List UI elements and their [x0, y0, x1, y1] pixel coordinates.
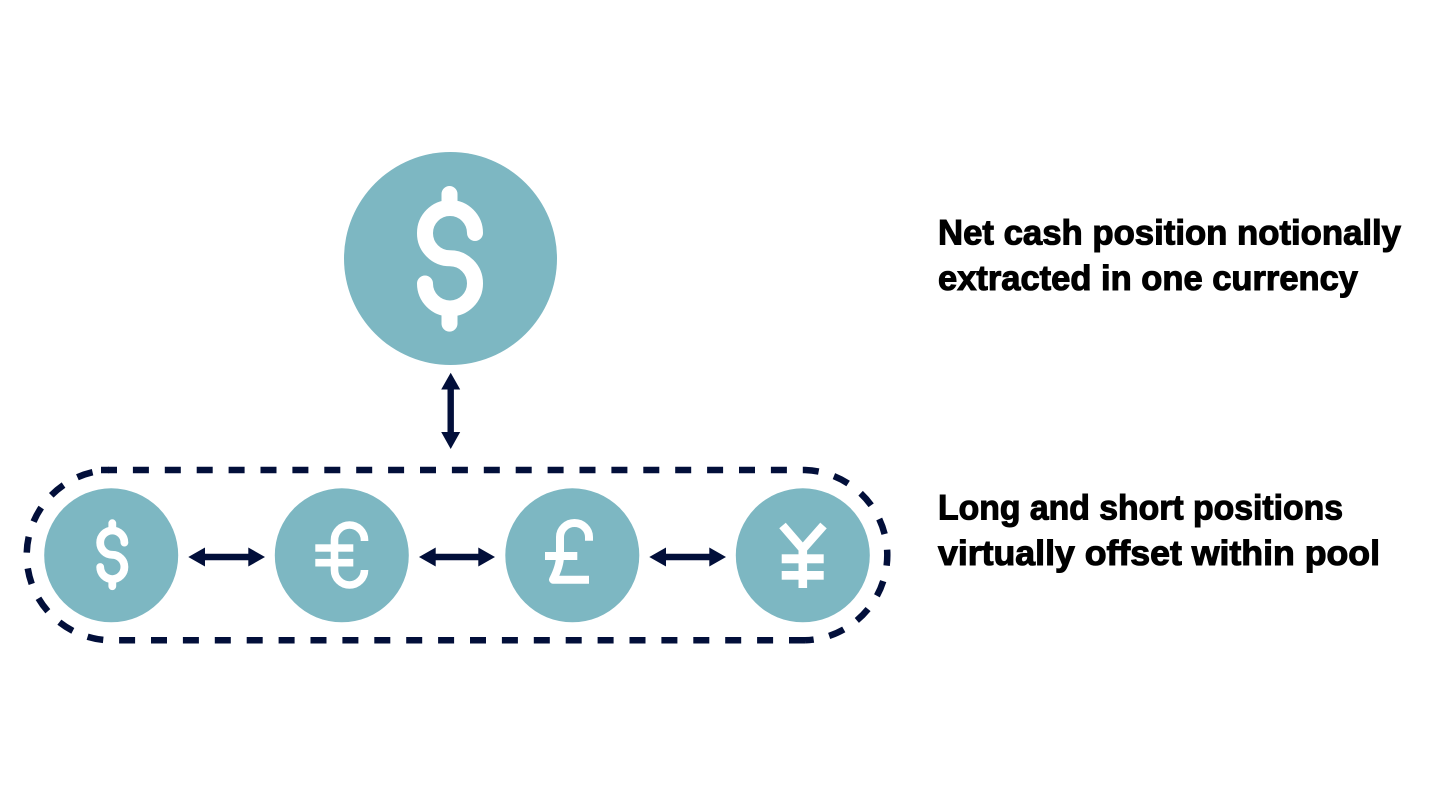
- icon: net position dollar coin: [344, 152, 557, 365]
- icon: dollar coin: [44, 488, 178, 622]
- text: long and short positions label: virtually offset within pool: [938, 534, 1380, 573]
- text: long and short positions label: Long and short positions: [938, 488, 1343, 528]
- icon: pound coin: [505, 488, 639, 622]
- dashed pool boundary: [27, 470, 887, 640]
- text: long and short positions label: [938, 488, 1380, 573]
- text: net cash position label: [938, 214, 1402, 298]
- arrow: dollar to euro: [188, 548, 265, 566]
- arrow: vertical two-way between net position and pool: [441, 373, 460, 449]
- text: net cash position label: Net cash position notionally: [938, 214, 1402, 252]
- text: net cash position label: extracted in one currency: [938, 259, 1359, 298]
- arrow: euro to pound: [419, 548, 495, 566]
- icon: euro coin: [275, 488, 409, 622]
- icon: yen coin: [736, 488, 870, 622]
- arrow: pound to yen: [649, 548, 726, 566]
